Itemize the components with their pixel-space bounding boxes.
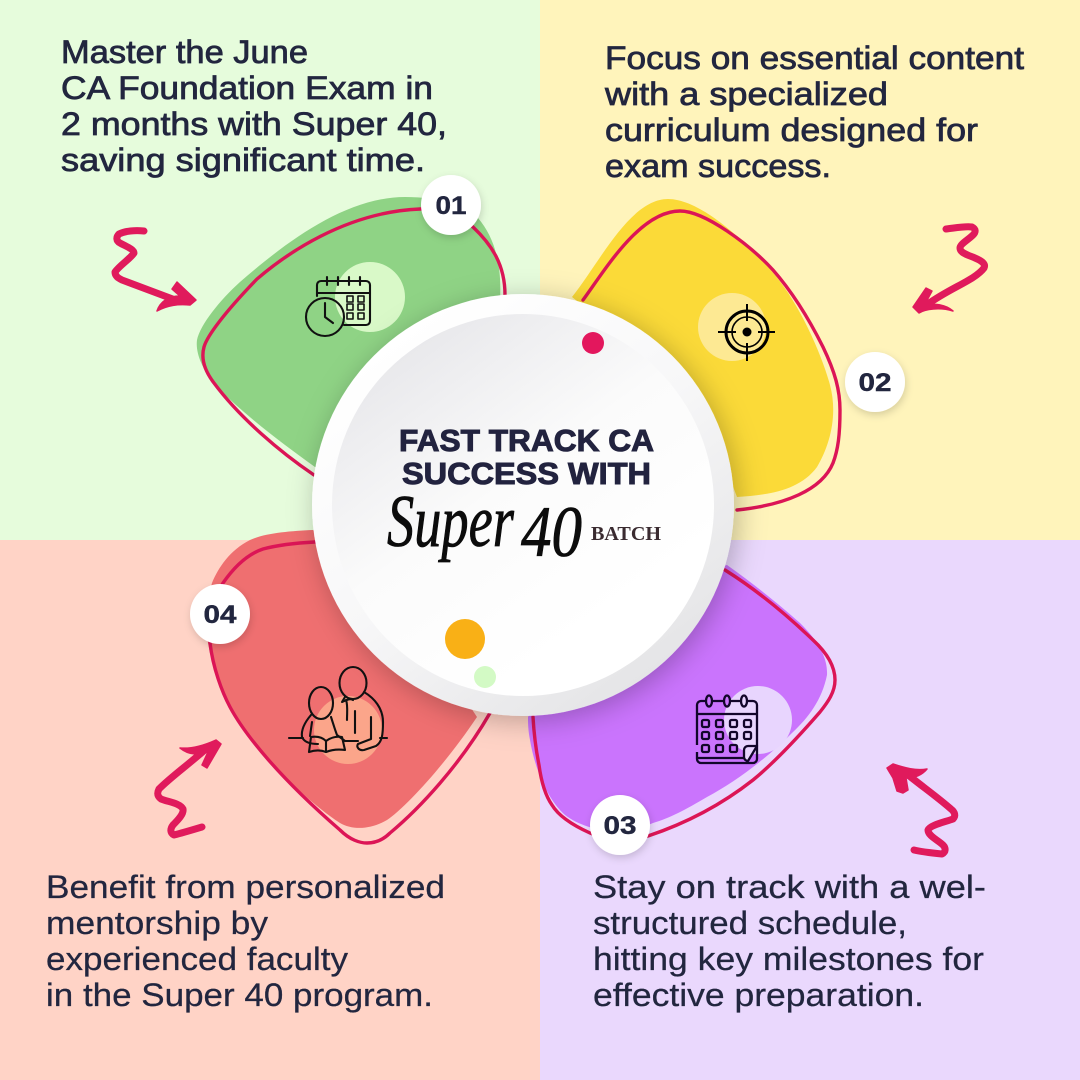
text block: point 01: saving significant time. xyxy=(61,142,425,178)
text block: point 02: curriculum designed for xyxy=(605,112,978,148)
text block: point 04: Benefit from personalized xyxy=(46,869,445,905)
text block: point 04: mentorship by xyxy=(46,905,268,941)
badge 04: 04 xyxy=(204,601,237,629)
text block: point 01: Master the June xyxy=(61,34,308,70)
text block: point 04: in the Super 40 program. xyxy=(46,977,433,1013)
panel: top-left green background xyxy=(0,0,540,540)
heading: fast track CA success with xyxy=(399,423,654,491)
dot: pink xyxy=(582,332,604,354)
text block: point 02: with a specialized xyxy=(604,76,888,112)
text block: point 03 xyxy=(593,869,986,1013)
text block: point 02: Focus on essential content xyxy=(605,40,1024,76)
badge 02: 02 xyxy=(858,369,892,397)
text block: point 04 xyxy=(46,869,445,1013)
arrow: towards petal 03 xyxy=(887,764,955,854)
badge 01 xyxy=(421,175,481,235)
arrow: towards petal 04 xyxy=(158,740,221,835)
text block: point 01: CA Foundation Exam in xyxy=(61,70,433,106)
badge 04 xyxy=(190,584,250,644)
text block: point 03: structured schedule, xyxy=(593,905,907,941)
text block: point 03: effective preparation. xyxy=(593,977,924,1013)
badge 02 xyxy=(845,352,905,412)
petal 01: green xyxy=(197,197,505,475)
heading: fast track CA success with: SUCCESS WITH xyxy=(402,456,651,491)
petal 04: red xyxy=(206,530,490,843)
icon: calendar with clock xyxy=(306,277,370,336)
panel: bottom-right purple background xyxy=(540,540,1080,1080)
arrow: towards petal 02 xyxy=(913,227,985,313)
text block: point 03: Stay on track with a wel- xyxy=(593,869,986,905)
central circle: title badge xyxy=(312,294,734,716)
text block: point 02 xyxy=(604,40,1024,184)
badge 01: 01 xyxy=(436,192,467,220)
text block: point 01 xyxy=(61,34,447,178)
icon: mentor and student reading xyxy=(289,667,387,752)
heading: batch: BATCH xyxy=(591,523,661,545)
text block: point 02: exam success. xyxy=(605,148,831,184)
panel: bottom-left peach background xyxy=(0,540,540,1080)
petal 02: yellow xyxy=(572,199,840,510)
dot: orange xyxy=(445,619,485,659)
panel: top-right yellow background xyxy=(540,0,1080,540)
text block: point 04: experienced faculty xyxy=(46,941,348,977)
icon: target crosshair xyxy=(718,304,775,361)
badge 03 xyxy=(590,795,650,855)
text block: point 01: 2 months with Super 40, xyxy=(61,106,447,142)
heading: Super 40 script: 40 xyxy=(521,492,582,572)
heading: fast track CA success with: FAST TRACK CA xyxy=(399,423,654,458)
petal 03: purple xyxy=(528,565,835,840)
text block: point 03: hitting key milestones for xyxy=(593,941,984,977)
arrow: towards petal 01 xyxy=(115,231,196,311)
badge 03: 03 xyxy=(604,812,636,840)
heading: Super 40 script: Super xyxy=(387,481,515,563)
icon: wall calendar xyxy=(697,696,757,763)
dot: pale green xyxy=(474,666,496,688)
